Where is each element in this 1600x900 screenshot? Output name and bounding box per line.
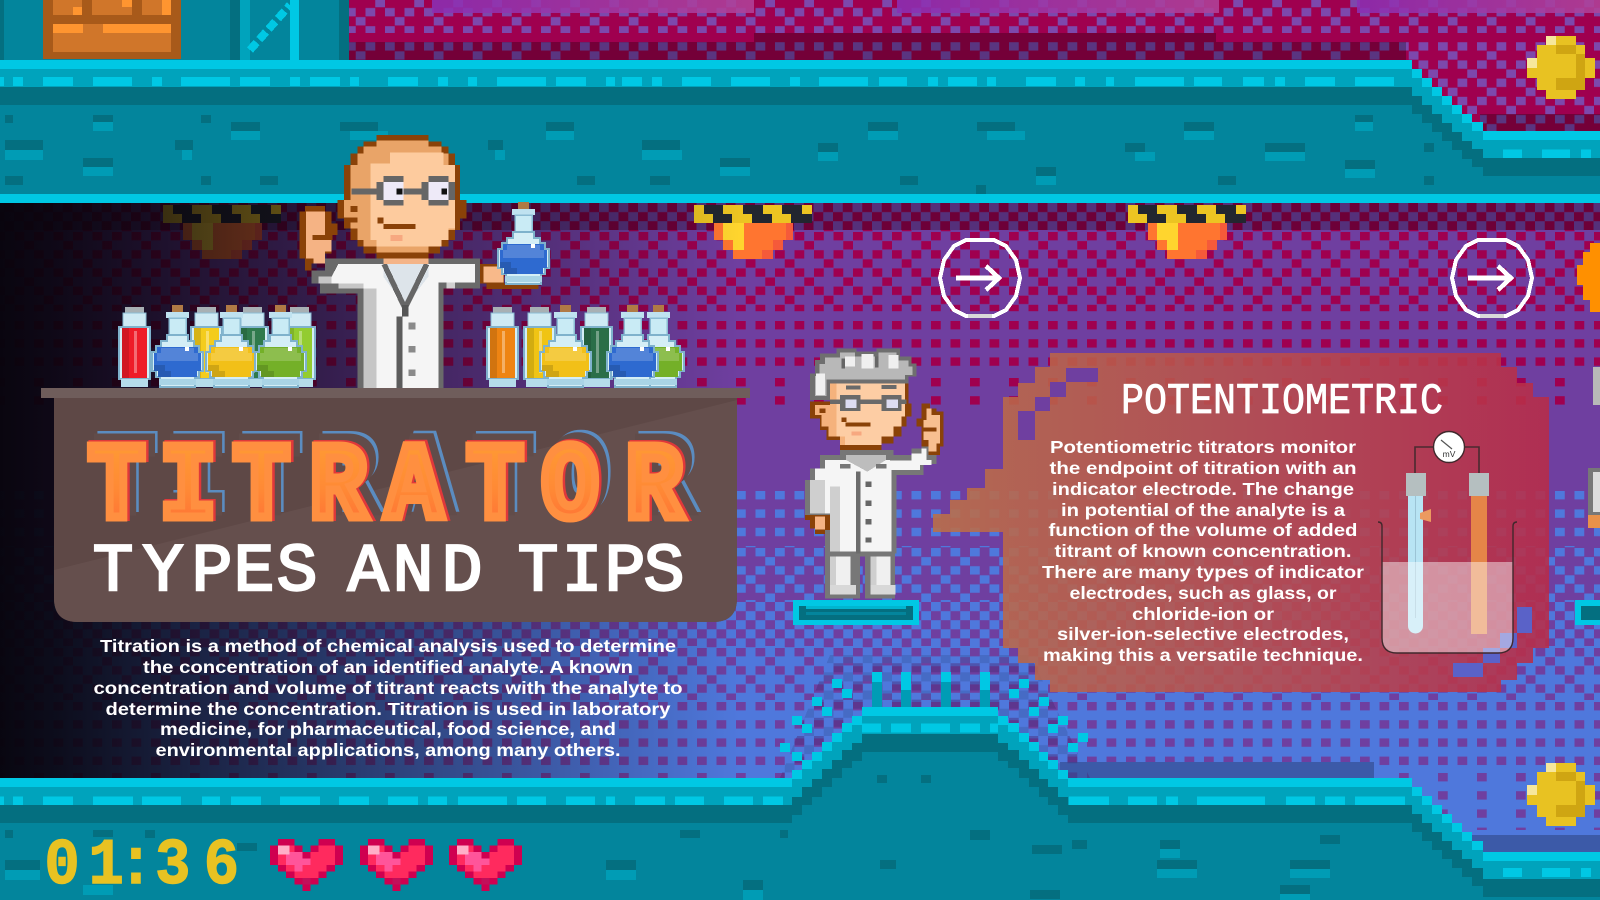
text block: titration intro: determine the concentration. Titration is used in laboratory: [106, 699, 671, 719]
icon: orange coin at right edge: [1577, 243, 1600, 312]
text block: titration intro: concentration and volume of titrant reacts with the analyte to: [94, 678, 682, 698]
text block: potentiometric description: chloride-ion or: [1132, 604, 1274, 624]
panel: title counter: [41, 388, 750, 622]
icon: hanging flame middle: [694, 205, 812, 259]
icon: coin bottom: [1527, 763, 1595, 826]
spikes above hill: [780, 672, 1088, 761]
arrow: circle arrow one: [940, 240, 1020, 318]
hatch around hill: [780, 655, 1090, 778]
bottles left group: [119, 305, 315, 387]
subtitle: types and tips: TYPES AND TIPS: [93, 534, 684, 611]
bottles right group: [487, 305, 684, 387]
bottom teal band with hill: [0, 707, 1600, 900]
text block: potentiometric description: There are many types of indicator: [1042, 562, 1364, 582]
scientist holding flask: [299, 135, 538, 388]
text block: titration intro: the concentration of an identified analyte. A known: [143, 657, 633, 677]
icon: heart one: [270, 839, 343, 891]
icon: heart three: [449, 839, 522, 891]
text block: potentiometric description: titrant of known concentration.: [1054, 541, 1352, 561]
scientist pointing up on platform: [805, 348, 943, 598]
text block: potentiometric description: the endpoint of titration with an: [1050, 458, 1356, 478]
icon: hanging flame right: [1128, 205, 1246, 259]
title: TITRATOR: TITRATOR: [96, 420, 691, 543]
text block: titration intro: environmental applications, among many others.: [156, 740, 620, 760]
platform right edge and next scientist: [1575, 367, 1600, 625]
icon: coin top: [1527, 36, 1595, 99]
top teal tile with brick block: [0, 0, 349, 60]
title: TITRATOR: TITRATOR: [88, 427, 683, 550]
text block: potentiometric description: in potential of the analyte is a: [1061, 500, 1345, 520]
text block: potentiometric description: function of the volume of added: [1048, 520, 1358, 540]
arrow: circle arrow two: [1452, 240, 1532, 318]
dark fade on left of background: [0, 203, 740, 783]
text block: potentiometric description: making this a versatile technique.: [1043, 645, 1363, 665]
icon: held blue flask: [498, 202, 549, 284]
top teal band platform: [0, 60, 1600, 203]
icon: hanging flame left: [163, 205, 281, 259]
text block: potentiometric description: electrodes, such as glass, or: [1070, 583, 1337, 603]
text block: potentiometric description: indicator electrode. The change: [1052, 479, 1354, 499]
title: TITRATOR: TITRATOR: [90, 426, 685, 549]
diagram: electrode beaker with mV meter: [1378, 432, 1517, 653]
platform under scientist: [793, 600, 919, 625]
heading: potentiometric: POTENTIOMETRIC: [1121, 377, 1443, 427]
text block: potentiometric description: [1042, 437, 1364, 665]
icon: heart two: [360, 839, 433, 891]
text block: titration intro: medicine, for pharmaceutical, food science, and: [160, 719, 616, 739]
title: TITRATOR: TITRATOR: [99, 417, 694, 540]
text block: titration intro: [94, 636, 682, 760]
diagram: electrode beaker with mV meter: mV: [1443, 449, 1456, 459]
text block: titration intro: Titration is a method of chemical analysis used to determine: [100, 636, 676, 656]
text block: potentiometric description: silver-ion-selective electrodes,: [1057, 624, 1349, 644]
text block: potentiometric description: Potentiometric titrators monitor: [1050, 437, 1356, 457]
panel: potentiometric: [933, 353, 1549, 692]
